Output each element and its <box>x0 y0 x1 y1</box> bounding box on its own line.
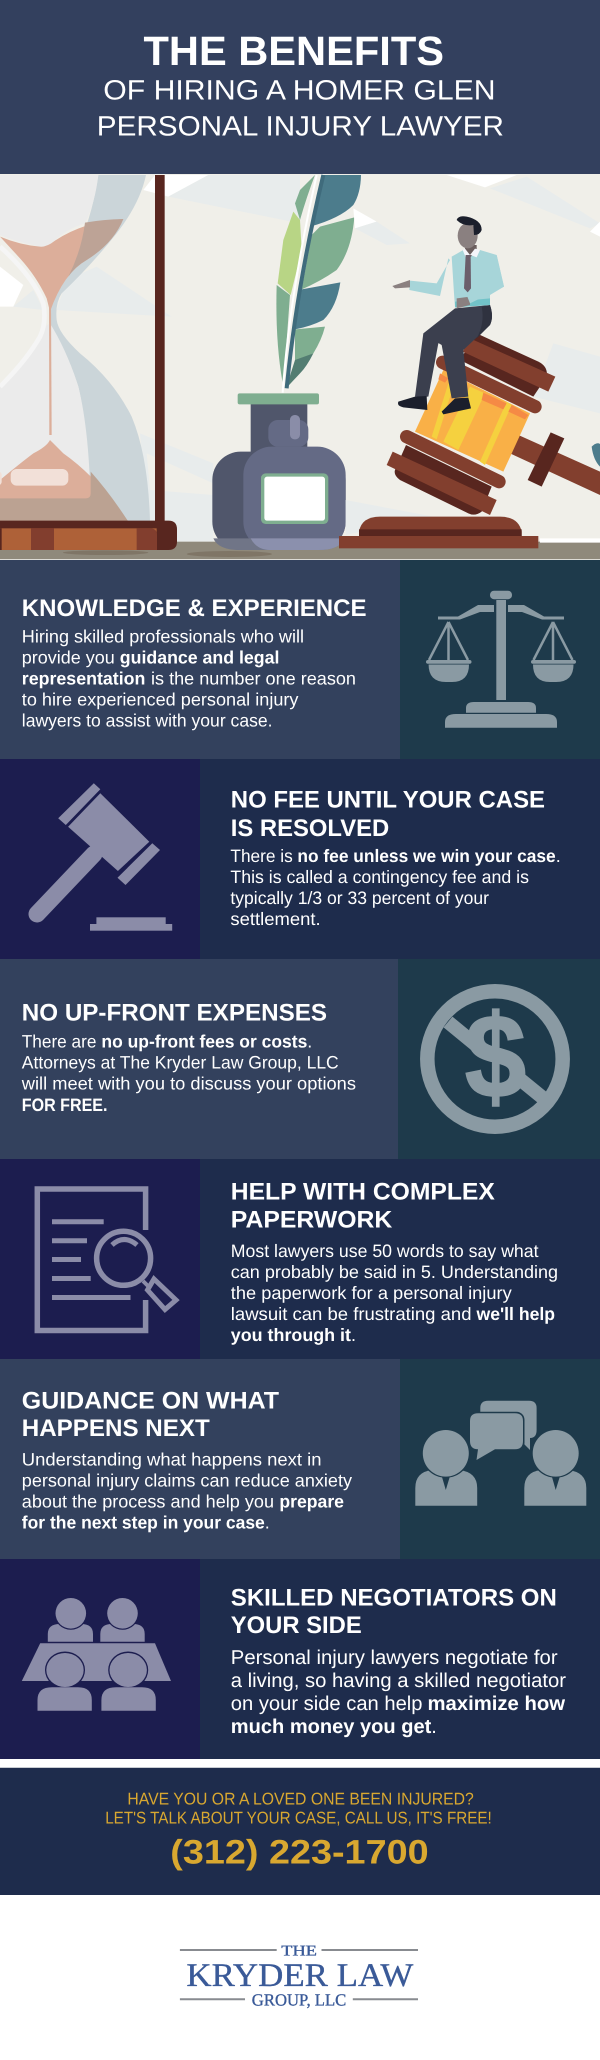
heading <box>22 1388 279 1442</box>
body text: Understanding what happens next in <box>22 1449 322 1469</box>
gavel <box>339 333 600 548</box>
body text: representation <box>22 668 145 688</box>
heading: PAPERWORK <box>231 1206 393 1233</box>
heading: KNOWLEDGE & EXPERIENCE <box>22 595 367 622</box>
heading: IS RESOLVED <box>231 815 389 842</box>
heading: GUIDANCE ON WHAT <box>22 1388 279 1415</box>
panel: no fee until resolved <box>0 759 600 959</box>
heading <box>231 787 545 842</box>
heading: YOUR SIDE <box>231 1612 362 1639</box>
table top <box>0 542 600 561</box>
header: title: OF HIRING A HOMER GLEN <box>103 74 496 105</box>
body text: personal injury claims can reduce anxiety <box>22 1470 352 1490</box>
body text: prepare <box>279 1491 344 1511</box>
header: title: PERSONAL INJURY LAWYER <box>97 111 504 142</box>
heading: SKILLED NEGOTIATORS ON <box>231 1585 557 1612</box>
call to action banner: HAVE YOU OR A LOVED ONE BEEN INJURED? <box>127 1789 474 1808</box>
header: title <box>0 0 600 174</box>
body text: FOR FREE. <box>22 1095 107 1115</box>
heading: HELP WITH COMPLEX <box>231 1178 495 1205</box>
icon: gavel <box>37 783 172 931</box>
body text: Most lawyers use 50 words to say what <box>231 1241 539 1261</box>
body text: There is <box>230 846 293 866</box>
logo: The Kryder Law Group <box>180 1944 418 2010</box>
body text: . <box>307 1032 312 1052</box>
body text: settlement. <box>230 909 321 929</box>
body text <box>21 1032 356 1115</box>
body text: Attorneys at The Kryder Law Group, LLC <box>22 1053 339 1073</box>
body text: guidance and legal <box>120 647 279 667</box>
body text <box>22 1449 352 1532</box>
body text: . <box>351 1325 356 1345</box>
body text <box>231 1241 558 1345</box>
panel: skilled negotiators <box>0 1559 600 1759</box>
body text: we'll help <box>476 1304 555 1324</box>
call to action banner: LET'S TALK ABOUT YOUR CASE, CALL US, IT'S FREE! <box>105 1808 492 1827</box>
body text <box>230 846 561 929</box>
body text: . <box>556 846 561 866</box>
man sitting on gavel <box>392 216 504 414</box>
heading <box>231 1178 495 1233</box>
ink bottle <box>212 393 346 550</box>
body text: the paperwork for a personal injury <box>231 1283 512 1303</box>
feather quill <box>276 175 361 393</box>
heading: NO FEE UNTIL YOUR CASE <box>231 787 545 814</box>
body text: typically 1/3 or 33 percent of your <box>230 888 489 908</box>
body text: about the process and help you <box>22 1491 274 1511</box>
body text: lawsuit can be frustrating and <box>231 1304 472 1324</box>
call to action banner: (312) 223-1700 <box>170 1833 429 1871</box>
header: title: THE BENEFITS <box>144 28 444 74</box>
body text: This is called a contingency fee and is <box>230 867 529 887</box>
icon: no dollar sign <box>427 991 563 1127</box>
body text: to hire experienced personal injury <box>22 689 299 709</box>
body text: provide you <box>22 647 115 667</box>
logo: The Kryder Law Group: THE <box>281 1944 317 1960</box>
body text: . <box>431 1716 437 1738</box>
body text: no fee unless we win your case <box>297 846 556 866</box>
logo: The Kryder Law Group: KRYDER LAW <box>186 1958 414 1994</box>
body text: Personal injury lawyers negotiate for <box>231 1647 558 1669</box>
icon: document with magnifier <box>37 1189 176 1330</box>
body text: lawyers to assist with your case. <box>22 710 272 730</box>
icon: scales of justice <box>426 591 576 728</box>
icon: no dollar sign: $ <box>465 991 526 1123</box>
body text: for the next step in your case <box>22 1512 265 1532</box>
panel: guidance on what happens next <box>0 1359 600 1559</box>
body text: can probably be said in 5. Understanding <box>231 1262 558 1282</box>
body text: . <box>265 1512 270 1532</box>
body text: you through it <box>231 1325 351 1345</box>
icon: negotiation table <box>22 1597 171 1711</box>
body text <box>231 1647 566 1738</box>
body text: much money you get <box>231 1716 432 1738</box>
heading <box>231 1585 557 1639</box>
heading: NO UP-FRONT EXPENSES <box>22 1000 327 1027</box>
body text: is the number one reason <box>151 668 356 688</box>
logo: The Kryder Law Group: GROUP, LLC <box>252 1991 346 2010</box>
panel: no up-front expenses <box>0 959 600 1159</box>
body text: a living, so having a skilled negotiator <box>231 1670 566 1692</box>
body text: There are <box>22 1032 96 1052</box>
body text <box>22 626 356 730</box>
panel: knowledge and experience <box>0 560 600 759</box>
body text: on your side can help <box>231 1693 422 1715</box>
panel: help with complex paperwork <box>0 1159 600 1359</box>
call to action banner <box>0 1767 600 1895</box>
illustration: hourglass, ink bottle and gavel <box>0 174 600 561</box>
body text: no up-front fees or costs <box>101 1032 307 1052</box>
heading: HAPPENS NEXT <box>22 1415 210 1442</box>
body text: Hiring skilled professionals who will <box>22 626 304 646</box>
body text: maximize how <box>428 1693 565 1715</box>
hourglass <box>0 175 150 522</box>
hourglass frame <box>0 175 177 550</box>
body text: will meet with you to discuss your options <box>21 1074 356 1094</box>
icon: two people talking <box>415 1401 586 1506</box>
